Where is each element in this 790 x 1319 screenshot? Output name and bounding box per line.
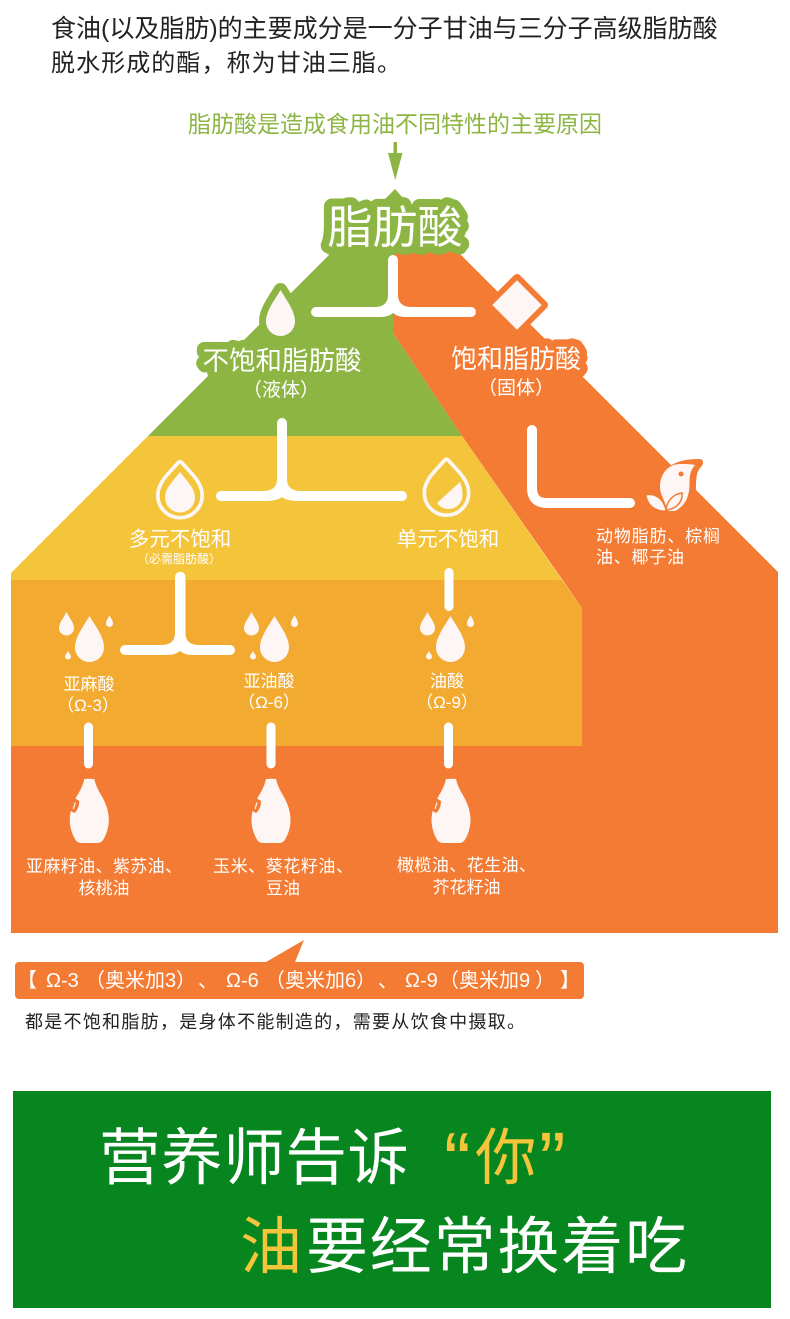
label: saturated foods: [596, 527, 720, 567]
icon: monounsaturated drop: [424, 459, 469, 515]
icon: bottle 1: [70, 779, 109, 843]
connector: omega-9 to oils: [444, 727, 453, 764]
heading: fatty acid: 脂肪酸: [327, 202, 463, 253]
label: unsaturated: [202, 346, 362, 401]
note text: 都是不饱和脂肪，是身体不能制造的，需要从饮食中摄取。: [25, 1012, 525, 1032]
label: unsaturated: （液体）: [243, 379, 319, 401]
label: omega-3 oils: [26, 857, 182, 898]
callout: omega names: ）: [176, 969, 196, 992]
label: omega-3 oils: 亚麻籽油、紫苏油、: [26, 857, 182, 876]
label: omega-6 oils: 玉米、葵花籽油、: [213, 857, 353, 876]
icon: polyunsaturated drop: [158, 462, 202, 518]
label: linoleic acid: （Ω-6）: [238, 693, 300, 712]
icon: bird and leaves: [646, 459, 703, 511]
label: oleic acid: （Ω-9）: [416, 693, 478, 712]
label: omega-9 oils: [397, 856, 536, 897]
banner line 1: [99, 1116, 566, 1205]
label: oleic acid: [416, 672, 478, 712]
icon: omega-3 drops: [59, 612, 113, 662]
connector: monounsaturated: [444, 572, 454, 606]
label: linoleic acid: [238, 672, 300, 712]
label: saturated: [451, 344, 581, 399]
banner: [13, 1091, 771, 1308]
icon: bottle 2: [252, 779, 290, 843]
layer: unsaturated green: [148, 189, 462, 436]
connector: omega-3 to oils: [84, 727, 93, 764]
label: saturated foods: 动物脂肪、棕榈: [596, 527, 720, 546]
label: omega-9 oils: 芥花籽油: [432, 878, 500, 897]
connector: unsaturated split: [216, 418, 407, 501]
callout: omega names: （奥米加6: [265, 969, 356, 992]
connector: polyunsaturated split: [120, 572, 235, 655]
label: linolenic acid: （Ω-3）: [57, 696, 119, 715]
icon: liquid drop: [266, 290, 295, 336]
banner line 2: 油: [240, 1213, 302, 1282]
label: saturated: （固体）: [478, 377, 554, 399]
banner line 1: 营养师告诉: [99, 1124, 409, 1193]
banner line 2: 要经常换着吃: [306, 1213, 687, 1282]
subtitle: 脂肪酸是造成食用油不同特性的主要原因: [188, 111, 602, 137]
pyramid: [11, 189, 778, 933]
label: linolenic acid: 亚麻酸: [64, 675, 114, 694]
callout: omega names: ）: [356, 969, 376, 992]
icon: omega-6 drops: [244, 612, 298, 662]
intro text: 食油(以及脂肪)的主要成分是一分子甘油与三分子高级脂肪酸: [51, 15, 718, 43]
connector: fatty acid split: [311, 255, 476, 317]
connector: omega-6 to oils: [266, 727, 276, 764]
label: linoleic acid: 亚油酸: [244, 672, 294, 691]
label: polyunsaturated: （必需脂肪酸）: [137, 551, 221, 566]
label: omega-9 oils: 橄榄油、花生油、: [397, 856, 536, 875]
label: oleic acid: 油酸: [430, 672, 464, 691]
layer: saturated orange: [11, 251, 778, 933]
callout: omega names: 】: [560, 970, 580, 992]
callout: omega names: （奥米加9: [439, 969, 530, 992]
banner line 1: ”: [539, 1116, 566, 1205]
layer: fatty acid amber: [11, 580, 582, 746]
intro text: [51, 15, 718, 77]
connector: saturated: [532, 430, 630, 503]
banner line 1: 你: [475, 1124, 537, 1193]
icon: omega-9 drops: [420, 612, 474, 662]
callout: omega names: 【: [17, 970, 37, 992]
label: omega-3 oils: 核桃油: [78, 879, 130, 898]
callout: omega names: Ω-9: [405, 970, 438, 992]
label: saturated: 饱和脂肪酸: [451, 344, 581, 374]
label: polyunsaturated: 多元不饱和: [129, 528, 231, 551]
callout: omega names: 、: [198, 970, 218, 992]
label: saturated foods: 油、椰子油: [596, 548, 684, 567]
icon: bottle 3: [432, 779, 470, 843]
layer: unsaturated yellow: [11, 436, 562, 580]
label: linolenic acid: [57, 675, 119, 715]
arrow: [388, 142, 402, 180]
label: unsaturated: 不饱和脂肪酸: [202, 346, 362, 376]
callout: omega names: ）: [535, 969, 555, 992]
callout: omega names: Ω-6: [226, 970, 259, 992]
label: omega-6 oils: 豆油: [266, 879, 300, 898]
callout: omega names: 、: [378, 970, 398, 992]
banner line 1: “: [444, 1116, 471, 1205]
callout: omega names: [15, 940, 584, 999]
icon: solid diamond: [490, 278, 544, 332]
label: monounsaturated: 单元不饱和: [397, 528, 499, 551]
callout: omega names: Ω-3: [46, 970, 79, 992]
label: polyunsaturated: [129, 528, 231, 566]
callout: omega names: （奥米加3: [85, 969, 176, 992]
intro text: 脱水形成的酯，称为甘油三脂。: [51, 50, 401, 77]
label: omega-6 oils: [213, 857, 353, 898]
